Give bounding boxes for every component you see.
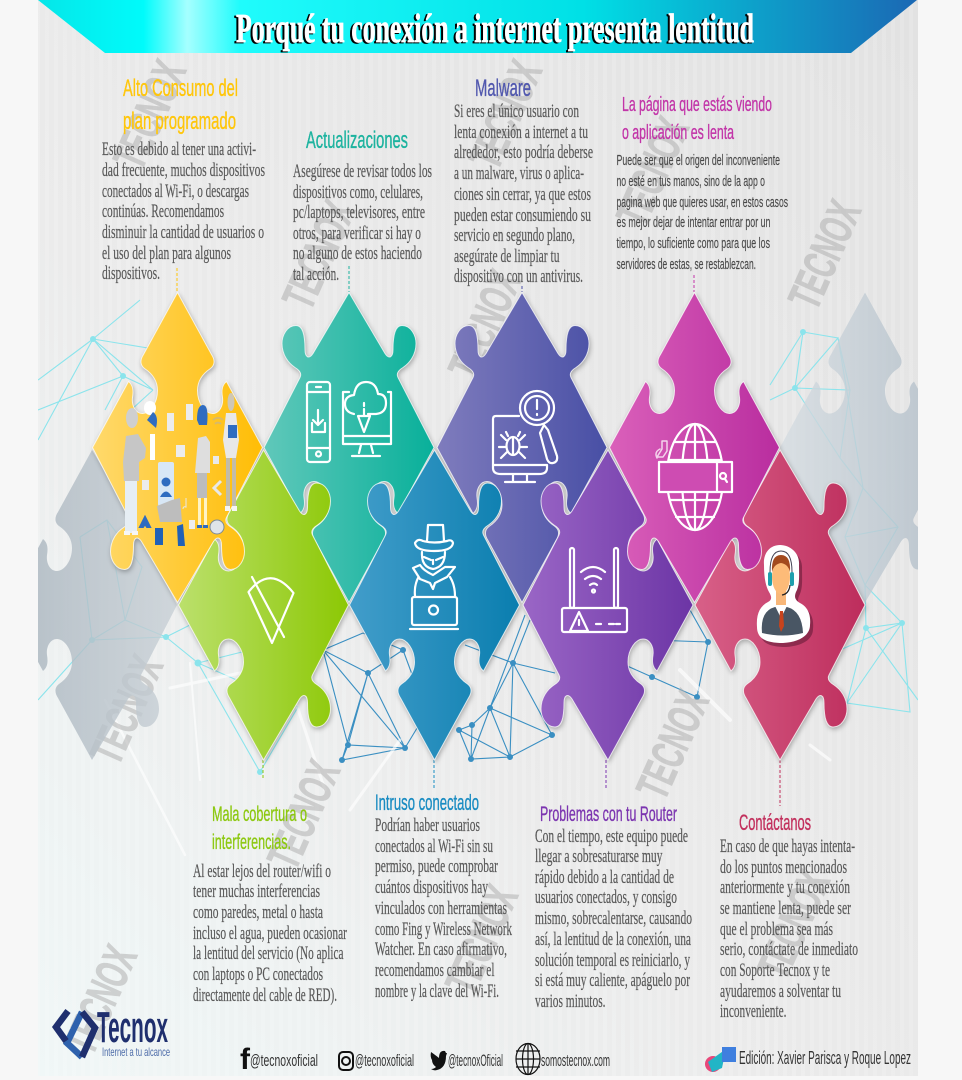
footer: social links: @tecnoxOficial — [448, 1051, 503, 1070]
man with tablet — [223, 393, 239, 511]
watermarks: TECNOX — [626, 683, 719, 806]
body: el uso del plan para algunos — [102, 243, 231, 264]
heading: plan programado — [123, 108, 236, 135]
body: varios minutos. — [535, 991, 606, 1012]
body: Esto es debido al tener una activi- — [102, 139, 256, 160]
heading: La página que estás viendo — [622, 94, 772, 116]
icon: instagram — [339, 1052, 353, 1070]
body: lenta conexión a internet a tu — [454, 122, 588, 143]
body — [102, 139, 265, 284]
text block: mala cobertura — [193, 803, 347, 1006]
text block: pagina lenta — [616, 94, 788, 273]
footer: social links — [240, 1043, 610, 1076]
heading: Malware — [475, 75, 531, 102]
body: Si eres el único usuario con — [454, 101, 579, 122]
body: otros, para verificar si hay o — [293, 223, 421, 244]
body: dispositivo con un antivirus. — [454, 266, 583, 287]
puzzle: gray decorative pieces — [7, 292, 950, 760]
body: pagina web que quieres usar, en estos casos — [616, 194, 788, 211]
body: Al estar lejos del router/wifi o — [193, 861, 331, 882]
body: conectados al Wi-Fi sin su — [375, 836, 493, 857]
body: Con el tiempo, este equipo puede — [535, 826, 688, 847]
body: servicio en segundo plano, — [454, 225, 575, 246]
body: Watcher. En caso afirmativo, — [375, 939, 507, 960]
body: que el problema sea más — [720, 919, 833, 940]
watermarks: TECNOX — [747, 863, 840, 986]
body: anteriormente y tu conexión — [720, 877, 850, 898]
body: servidores de estas, se restablezcan. — [616, 256, 756, 273]
icon: bug on monitor with magnifier — [493, 391, 557, 482]
heading — [212, 803, 307, 854]
body — [193, 861, 347, 1006]
body — [535, 826, 692, 1012]
body: con Soporte Tecnox y te — [720, 960, 830, 981]
body: no alguno de estos haciendo — [293, 243, 422, 264]
watermarks: TECNOX — [272, 193, 365, 316]
body: Asegúrese de revisar todos los — [293, 161, 432, 182]
man with phone — [123, 408, 146, 535]
network: blue lines — [323, 610, 711, 763]
text block: actualizaciones — [293, 127, 432, 285]
logo: Tecnox — [56, 1003, 170, 1059]
body: serio, contáctate de inmediato — [720, 939, 858, 960]
app tiles — [142, 404, 193, 490]
body: En caso de que hayas intenta- — [720, 836, 855, 857]
body: tiempo, lo suficiente como para que los — [616, 235, 770, 252]
body: como Fing y Wireless Network — [375, 919, 512, 940]
icon: support agent — [757, 545, 813, 647]
body: dad frecuente, muchos dispositivos — [102, 160, 265, 181]
watermarks: TECNOX — [438, 263, 531, 386]
watermarks: TECNOX — [257, 753, 350, 876]
body: conectados al Wi-Fi, o descargas — [102, 181, 249, 202]
heading — [622, 94, 772, 144]
icon: people with devices — [123, 393, 239, 546]
heading: Intruso conectado — [375, 790, 479, 815]
heading — [123, 75, 238, 135]
watermarks: TECNOX — [80, 648, 173, 771]
instagram handle: @tecnoxoficial — [355, 1051, 414, 1070]
website: somostecnox.com — [541, 1051, 610, 1070]
body: permiso, puede comprobar — [375, 856, 498, 877]
watermarks: TECNOX — [54, 938, 147, 1061]
heading: Contáctanos — [739, 810, 811, 835]
heading: Alto Consumo del — [123, 75, 238, 102]
header banner — [38, 0, 917, 53]
body: recomendamos cambiar el — [375, 960, 494, 981]
body: tener muchas interferencias — [193, 881, 320, 902]
body: dispositivos como, celulares, — [293, 182, 423, 203]
text block: contactanos — [720, 810, 858, 1022]
watermarks — [54, 53, 871, 1061]
chat bubble — [144, 401, 157, 428]
body: llegar a sobresaturarse muy — [535, 846, 663, 867]
body: se mantiene lenta, puede ser — [720, 898, 851, 919]
connectors: dashed lines — [177, 266, 780, 806]
body: usuarios conectados, y consigo — [535, 887, 677, 908]
icon: facebook: f — [240, 1043, 251, 1076]
body: a un malware, virus o aplica- — [454, 163, 584, 184]
body: Puede ser que el origen del inconveniente — [616, 152, 780, 169]
body: con laptops o PC conectados — [193, 964, 323, 985]
body: como paredes, metal o hasta — [193, 902, 323, 923]
heading: Problemas con tu Router — [540, 803, 677, 826]
heading: o aplicación es lenta — [622, 122, 735, 144]
body: vinculados con herramientas — [375, 898, 507, 919]
body: asegúrate de limpiar tu — [454, 246, 560, 267]
icon: globe with search bar — [656, 424, 732, 530]
body: rápido debido a la cantidad de — [535, 867, 674, 888]
icon: edition mark — [705, 1047, 736, 1072]
infographic: Tecnox — [97, 1003, 168, 1052]
body: continúas. Recomendamos — [102, 201, 224, 222]
hand with phone — [155, 462, 185, 546]
body — [454, 101, 593, 287]
watermarks: TECNOX — [435, 878, 528, 1001]
text block: intruso conectado — [375, 790, 512, 1002]
body: solución temporal es reiniciarlo, y — [535, 950, 690, 971]
heading: Actualizaciones — [306, 127, 408, 154]
body: tal acción. — [293, 264, 339, 285]
watermarks: TECNOX — [606, 110, 699, 233]
body — [720, 836, 858, 1022]
body: ciones sin cerrar, ya que estos — [454, 184, 591, 205]
body: do los puntos mencionados — [720, 857, 847, 878]
body: Podrían haber usuarios — [375, 815, 480, 836]
body: incluso el agua, pueden ocasionar — [193, 923, 347, 944]
text block: malware — [454, 75, 593, 287]
body: disminuir la cantidad de usuarios o — [102, 222, 264, 243]
light beams — [105, 663, 830, 855]
body: no esté en tus manos, sino de la app o — [616, 173, 765, 190]
small symbols — [140, 418, 224, 534]
body: mismo, sobrecalentarse, causando — [535, 908, 692, 929]
heading: Mala cobertura o — [212, 803, 307, 826]
body: pueden estar consumiendo su — [454, 205, 591, 226]
icon: spy with laptop — [410, 525, 458, 629]
body: dispositivos. — [102, 263, 160, 284]
network: cyan lines — [38, 300, 918, 775]
body: inconveniente. — [720, 1001, 786, 1022]
icon: phone and monitor download — [307, 382, 391, 462]
body: así, la lentitud de la conexión, una — [535, 929, 691, 950]
watermarks: TECNOX — [778, 193, 871, 316]
icon: twitter — [431, 1051, 447, 1070]
body: cuántos dispositivos hay — [375, 877, 488, 898]
text block: alto consumo — [102, 75, 265, 284]
logo mark — [56, 1011, 95, 1057]
text block: problemas con tu router — [535, 803, 692, 1012]
body — [293, 161, 432, 285]
woman — [195, 405, 210, 528]
body: directamente del cable de RED). — [193, 985, 337, 1006]
icon: no wifi fan — [248, 577, 294, 643]
icon: web globe — [516, 1043, 540, 1075]
heading: interferencias. — [212, 831, 291, 854]
credits — [705, 1047, 911, 1072]
icon: router — [562, 548, 627, 632]
body: la lentitud del servicio (No aplica — [193, 943, 344, 964]
body: pc/laptops, televisores, entre — [293, 202, 425, 223]
puzzle pieces — [92, 292, 865, 760]
body: nombre y la clave del Wi-Fi. — [375, 981, 499, 1002]
body: ayudaremos a solventar tu — [720, 981, 841, 1002]
body: alrededor, esto podría deberse — [454, 142, 593, 163]
tagline: Internet a tu alcance — [102, 1045, 170, 1059]
body — [616, 152, 788, 273]
body: si está muy caliente, apáguelo por — [535, 970, 690, 991]
facebook handle: @tecnoxoficial — [250, 1051, 318, 1070]
body: es mejor dejar de intentar entrar por un — [616, 214, 770, 231]
body — [375, 815, 512, 1002]
